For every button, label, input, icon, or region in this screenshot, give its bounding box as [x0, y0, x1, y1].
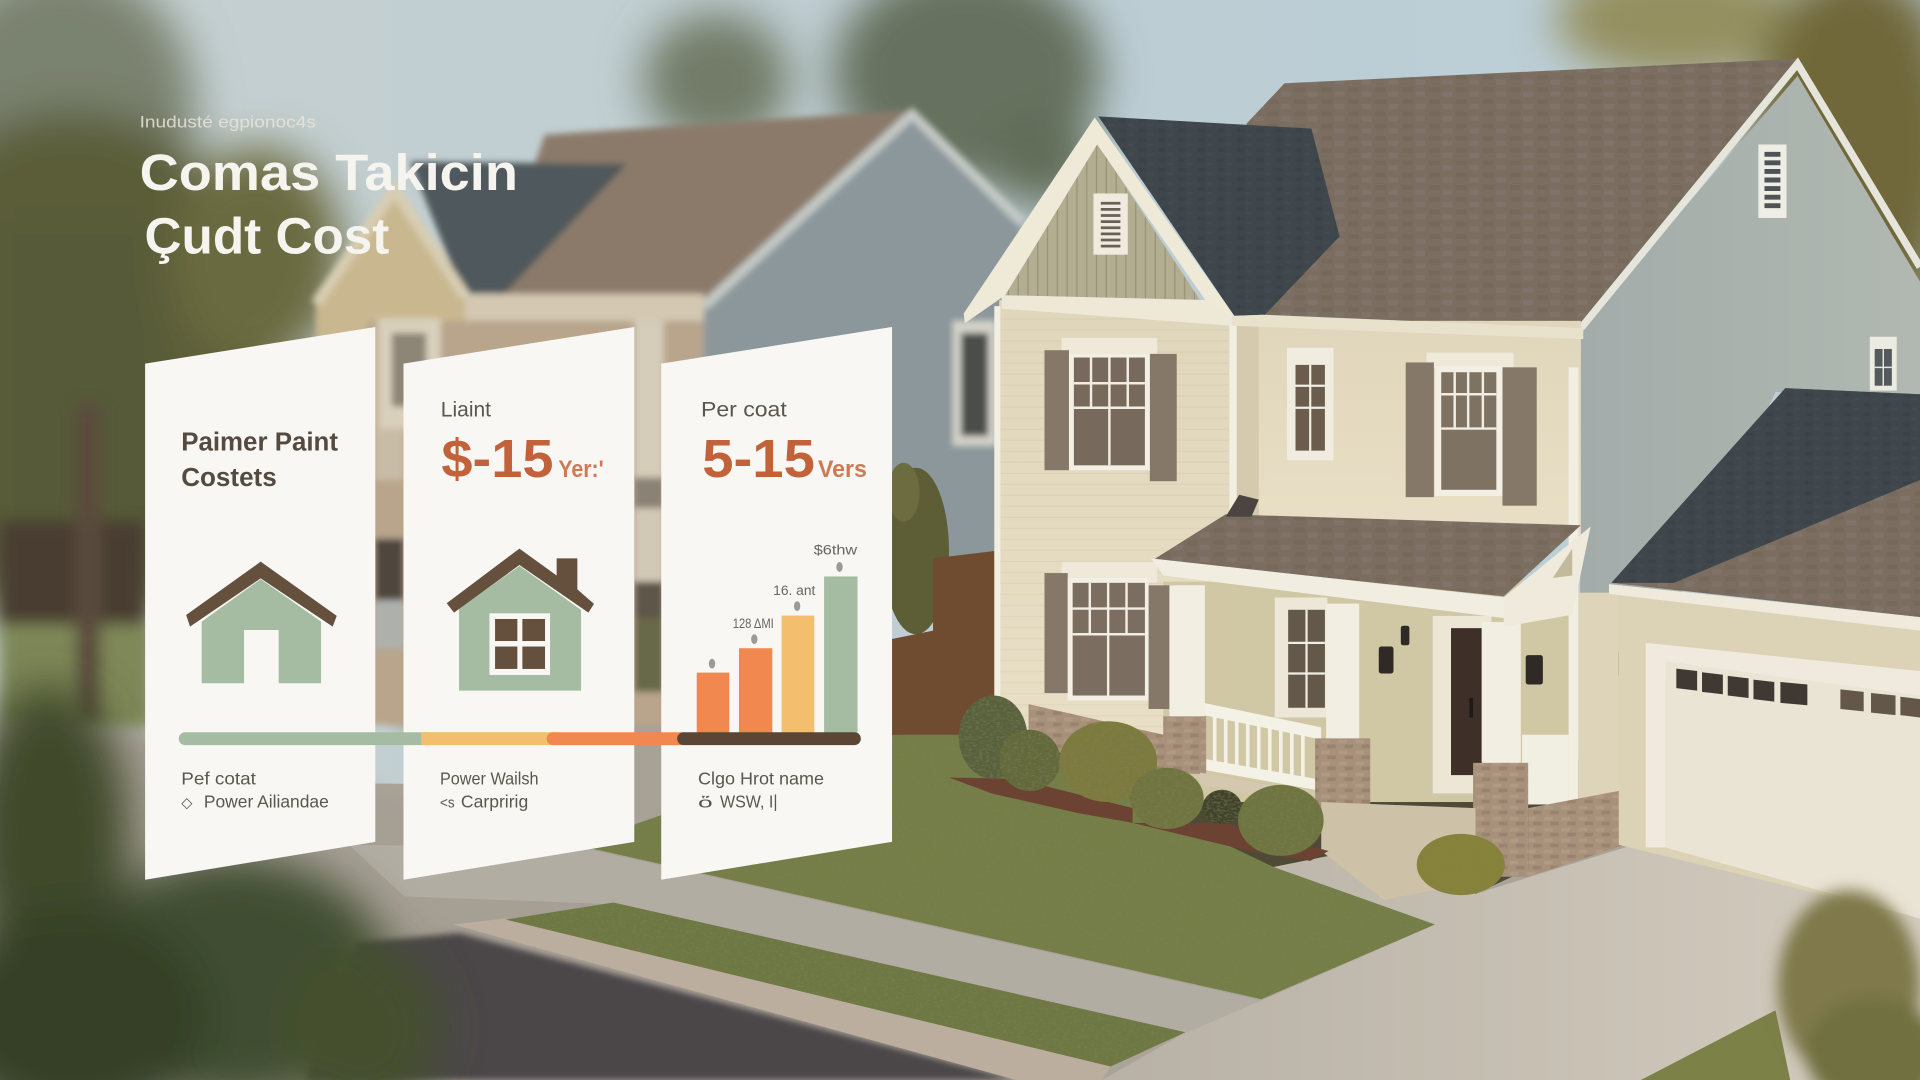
panel heading: Paimer Paint: [181, 429, 338, 457]
panel caption: <s: [440, 796, 455, 812]
duration value: 5-15: [702, 429, 815, 489]
panel caption: WSW, I|: [720, 792, 778, 812]
gutter: [1232, 315, 1583, 339]
progress bar spanning panels: [179, 732, 861, 745]
icon: house with door: [186, 562, 337, 683]
panel caption: Power Wailsh: [440, 768, 539, 788]
blurred trees: [0, 0, 1920, 624]
ground below house: [998, 735, 1580, 894]
panel caption: ◇: [181, 796, 193, 812]
main house: [949, 59, 1920, 918]
shrubs: [959, 696, 1505, 895]
grass strip: [506, 902, 1185, 1067]
eyebrow label: Inudusté egpionoc4s: [140, 112, 316, 131]
blurred foreground foliage right: [1778, 890, 1920, 1080]
door windows: [1676, 669, 1920, 718]
dark dormer roof: [1098, 116, 1340, 316]
small heading: Liaint: [441, 399, 491, 422]
gable trim: [1581, 64, 1920, 328]
wooden fence: [891, 551, 998, 744]
bar chart: [697, 543, 858, 733]
gable vent: [1093, 193, 1128, 255]
panel: right: [661, 327, 892, 880]
panel caption: Clgo Hrot name: [698, 768, 824, 788]
blurred ground: [0, 404, 980, 943]
panel heading: Costets: [181, 464, 277, 492]
right side vent: [1758, 144, 1787, 218]
panel caption: [440, 768, 539, 812]
small heading: Per coat: [701, 398, 787, 422]
porch deck and steps: [1200, 773, 1315, 806]
gable frame: [964, 118, 1234, 323]
driveway: [1102, 842, 1920, 1080]
panel: left: [145, 327, 375, 880]
porch door: [1433, 616, 1491, 793]
duration value: Vers: [818, 456, 867, 483]
small lawn corner: [1641, 1010, 1790, 1080]
gable panel: [1005, 143, 1200, 300]
window upper right: [1406, 353, 1537, 506]
duration value: [702, 429, 867, 489]
panel: middle: [403, 327, 634, 880]
window lower left: [1044, 562, 1174, 709]
garage wall: [1619, 590, 1920, 918]
title: [140, 143, 518, 264]
porch window: [1275, 598, 1327, 718]
upper wall: [1231, 321, 1581, 535]
bar chart: 128 ΔΜΙ: [733, 616, 774, 631]
panel caption: Power Ailiandae: [204, 792, 329, 812]
road: [306, 933, 1016, 1080]
sidewalk: [349, 845, 1261, 1035]
panel caption: [181, 768, 329, 812]
cream wall beside garage: [1578, 593, 1622, 801]
blurred neighbouring house: [316, 110, 1022, 725]
porch roof: [1153, 514, 1581, 596]
title: Çudt Cost: [144, 206, 389, 264]
panel heading: [181, 429, 338, 492]
sky: [0, 0, 1920, 808]
bar chart: 16. ant: [773, 583, 816, 598]
side tree: [883, 463, 949, 634]
panel caption: [698, 768, 824, 812]
main roof: [1247, 59, 1798, 328]
price value: $-15: [441, 429, 553, 489]
price value: Yer:': [558, 456, 604, 483]
window upper left: [1044, 338, 1177, 481]
panel caption: Pef cotat: [181, 768, 256, 788]
blurred foreground foliage left: [0, 686, 441, 1080]
bar chart: $6thw: [814, 543, 857, 558]
panel caption: Carpririg: [461, 792, 528, 812]
lower roof: [1611, 388, 1920, 617]
wall lamps: [1379, 626, 1633, 684]
ground base: [0, 784, 1920, 1080]
porch recess: [1163, 582, 1573, 802]
porch columns: [1169, 367, 1578, 857]
stone bases: [1029, 704, 1643, 877]
garage door: [1646, 643, 1920, 918]
title: Comas Takicin: [140, 143, 518, 201]
panel caption: ὅ: [698, 796, 713, 812]
porch fascia: [1151, 558, 1506, 618]
lawn: [576, 735, 1435, 999]
left wall: [999, 300, 1232, 741]
curb: [453, 918, 1111, 1080]
side wall: [1580, 76, 1920, 808]
mulch bed: [949, 778, 1133, 823]
garage fascia: [1609, 584, 1920, 631]
garage: [1609, 388, 1920, 918]
price value: [441, 429, 604, 489]
porch railing: [1204, 703, 1569, 804]
window upper middle: [1287, 348, 1333, 460]
icon: house with window: [447, 549, 594, 691]
small side window: [1870, 337, 1897, 391]
